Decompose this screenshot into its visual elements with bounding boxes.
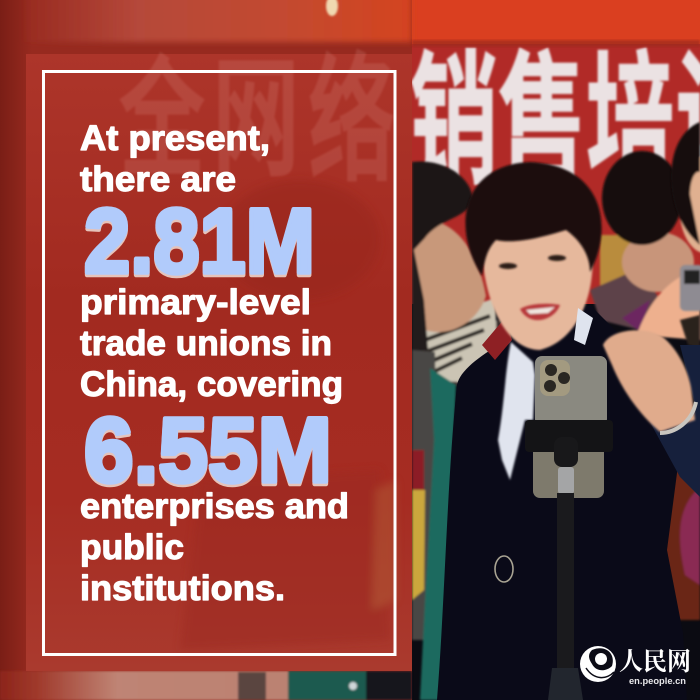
statement text block — [80, 119, 349, 608]
banner characters: 培 — [586, 4, 674, 214]
face — [482, 220, 593, 350]
dark band under ceiling — [412, 40, 700, 47]
banner characters — [410, 4, 700, 214]
panel: translucent red card — [26, 54, 412, 671]
smartphone on tripod — [525, 356, 613, 700]
left woman in background — [412, 161, 510, 700]
number: 6.55M: 6.55M — [84, 400, 332, 502]
red wash over the left side of the photo — [0, 0, 412, 700]
banner characters: 销 — [410, 4, 498, 214]
velvet jacket — [437, 305, 687, 700]
red banner — [412, 44, 700, 304]
eyes and mouth — [499, 255, 566, 320]
line: trade unions in: trade unions in — [80, 324, 332, 363]
line: enterprises and: enterprises and — [80, 487, 349, 526]
faded banner characters seen through panel: 网 — [212, 13, 300, 204]
line: public: public — [80, 528, 184, 567]
line: At present,: At present, — [80, 119, 270, 158]
ceiling lamp — [326, 0, 338, 16]
red scarf detail — [482, 318, 512, 360]
background lower right — [655, 470, 700, 620]
number: 2.81M: 2.81M — [84, 190, 315, 292]
white scarf — [498, 342, 535, 480]
hand — [603, 330, 695, 432]
line: institutions.: institutions. — [80, 569, 285, 608]
number shadow: 2.81M: 2.81M — [84, 193, 315, 295]
main woman — [437, 162, 700, 700]
banner characters: 售 — [498, 4, 586, 214]
red top band — [412, 0, 700, 46]
faded banner characters seen through panel — [118, 7, 396, 211]
line: China, covering: China, covering — [80, 365, 343, 404]
person at back right — [590, 151, 700, 340]
watch — [660, 402, 696, 433]
faded banner characters seen through panel: 全 — [118, 13, 206, 204]
logo: People's Daily Online — [580, 642, 691, 687]
faded figure seen through panel — [180, 180, 396, 650]
hair — [465, 162, 602, 276]
faded banner characters seen through panel: 络 — [308, 7, 396, 211]
logo url: en.people.cn — [629, 676, 686, 687]
lit top band on the left — [10, 0, 412, 42]
white frame — [44, 72, 395, 654]
number shadow: 6.55M: 6.55M — [84, 402, 332, 504]
collar — [574, 308, 593, 345]
line: there are: there are — [80, 160, 236, 199]
belt ring — [495, 556, 513, 582]
logo name: 人民网 — [619, 642, 691, 678]
sleeve — [645, 345, 700, 497]
line: primary-level: primary-level — [80, 283, 311, 322]
bottom strip below panel — [0, 671, 412, 700]
woman at far right — [671, 122, 700, 348]
icon: swirl globe — [580, 646, 616, 682]
